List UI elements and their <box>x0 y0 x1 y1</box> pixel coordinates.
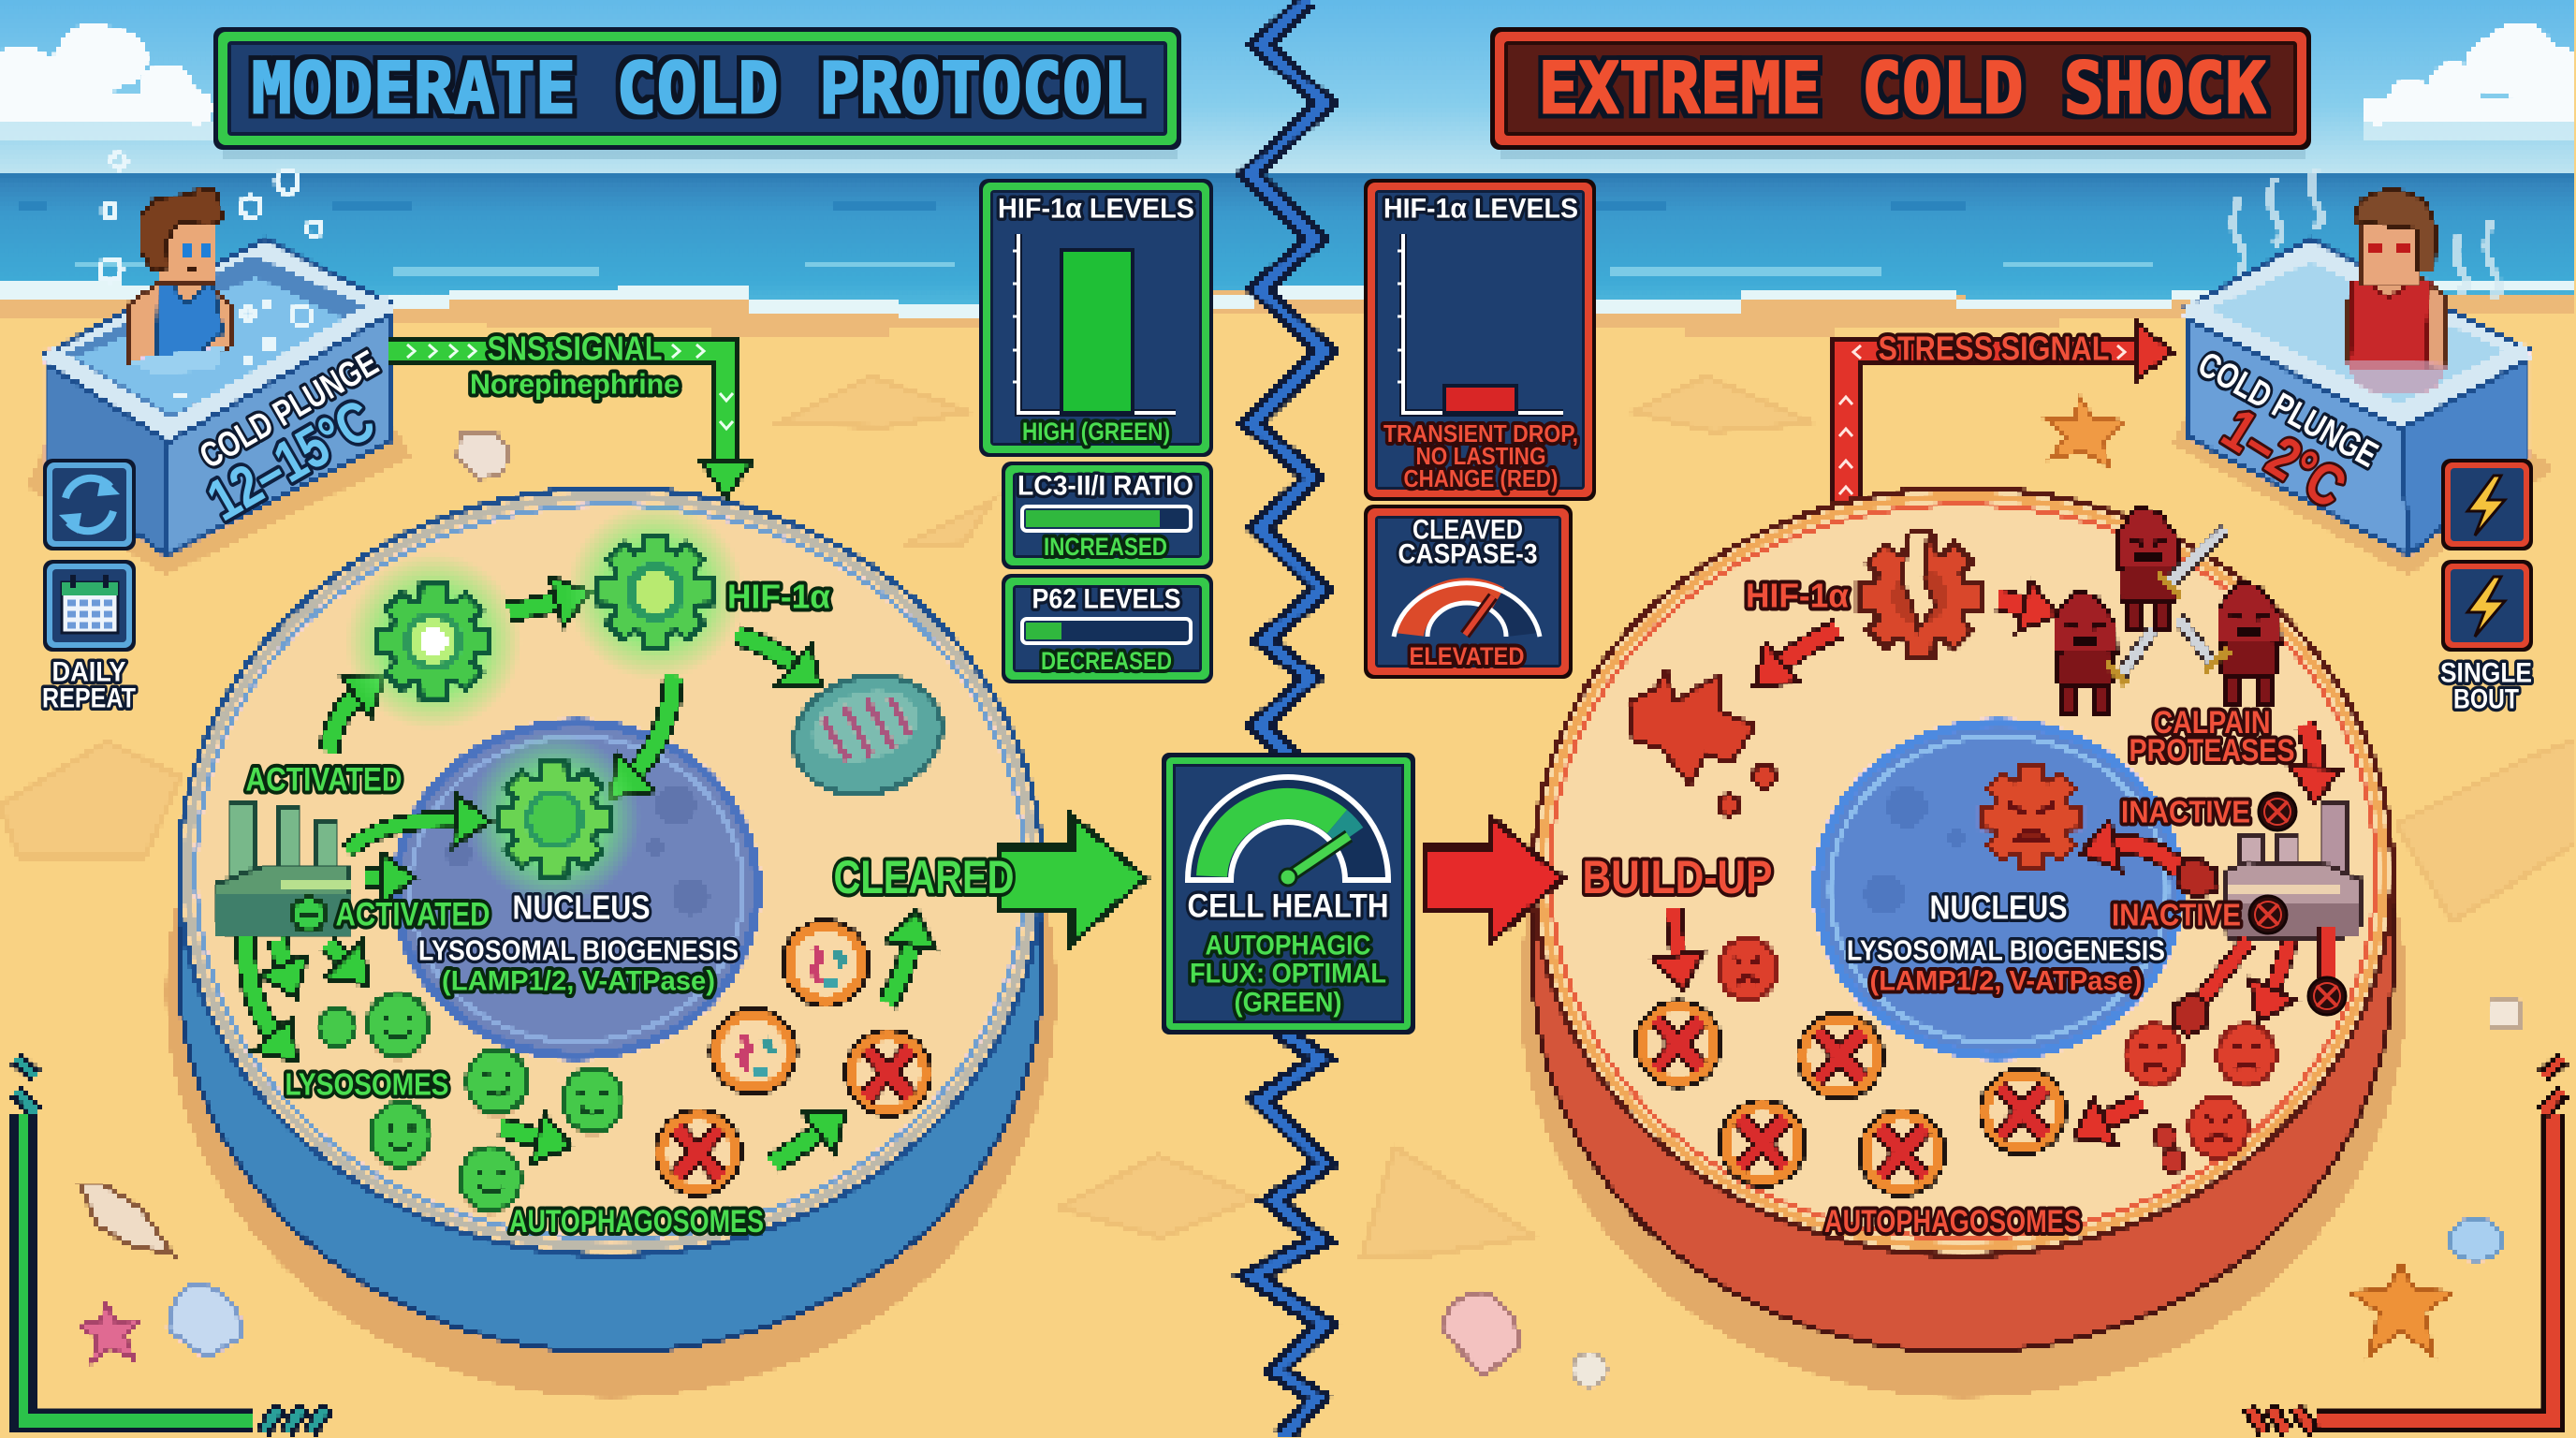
cell top surface <box>179 488 1042 1255</box>
label: lysosomal biogenesis right: LYSOSOMAL BIOGENESIS <box>1847 934 2165 966</box>
label: nucleus right: NUCLEUS <box>1930 888 2067 927</box>
label: lamp right: (LAMP1/2, V-ATPase) <box>1870 966 2142 996</box>
panel: right cell <box>1519 488 2407 1398</box>
nucleus: right <box>1817 723 2180 1056</box>
label: lysosomes: LYSOSOMES <box>285 1067 449 1101</box>
arrow: autophagosome to next <box>772 1127 826 1164</box>
sea ripples <box>19 206 2153 271</box>
autophagosomes: right <box>1633 999 2068 1197</box>
arrow: factory to gear 1 <box>329 691 363 752</box>
decorative beach items <box>79 398 2522 1387</box>
label: activated lower: ACTIVATED <box>335 897 490 932</box>
background: sand <box>0 290 2576 1438</box>
panel: hif-1a levels right: TRANSIENT DROP, <box>1383 419 1578 448</box>
icon: lightning top <box>2441 459 2533 550</box>
background: sea <box>0 172 2576 309</box>
arrow: gear 1 to gear 2 <box>508 599 565 612</box>
icon: inactive upper <box>2259 793 2296 830</box>
arrow: build-up big red <box>1424 815 1563 944</box>
gear: angry nuclear <box>1980 766 2083 869</box>
label: lamp left: (LAMP1/2, V-ATPase) <box>442 966 715 996</box>
cloud: left <box>0 22 213 139</box>
arrow: cleared big green <box>998 815 1146 944</box>
icon: lightning bottom <box>2441 560 2533 652</box>
panel: lc3 ratio: LC3-II/I RATIO <box>1017 470 1193 502</box>
nucleus: left <box>396 723 757 1056</box>
corner frame: bottom left <box>16 1058 328 1432</box>
person: calm swimmer <box>128 187 231 362</box>
lysosomes: sad <box>1719 938 2276 1172</box>
debris: near factory <box>2176 857 2218 899</box>
arrow: gear 2 to mitochondrion <box>736 635 801 670</box>
cell base <box>1533 872 2393 1352</box>
label: single bout <box>2440 657 2532 715</box>
label: autophagosomes left: AUTOPHAGOSOMES <box>509 1204 764 1240</box>
label: norepinephrine: Norepinephrine <box>470 367 680 401</box>
tub label: left: COLD PLUNGE <box>194 344 385 477</box>
arrow chevrons: sns <box>407 345 733 429</box>
arrow: calpain to factory <box>2305 724 2316 777</box>
arrow: broken gear to calpain <box>1998 599 2033 609</box>
SNS signal arrow <box>390 351 753 498</box>
sand dunes <box>0 376 2576 1255</box>
tub label: left: 12–15°C <box>198 388 385 534</box>
label: hif-1a right: HIF-1α <box>1746 577 1849 614</box>
label: lysosomal biogenesis left: LYSOSOMAL BIOGENESIS <box>418 934 739 966</box>
arrows: factory down <box>2200 927 2328 1002</box>
arrows: factory to lysosomes <box>246 936 350 1041</box>
arrow: autophagosome to cleared <box>886 936 913 1004</box>
label: activated upper: ACTIVATED <box>245 762 402 798</box>
panel: cleaved caspase-3: CASPASE-3 <box>1398 539 1537 569</box>
panel: hif-1a levels right: HIF-1α LEVELS <box>1383 193 1578 225</box>
calpain: goblin 3 <box>2178 581 2280 703</box>
label: build-up: BUILD-UP <box>1582 851 1773 903</box>
calpain: goblin 2 <box>2055 591 2153 712</box>
panel: hif-1a levels right: CHANGE (RED) <box>1404 464 1558 492</box>
debris: end of arrow <box>2174 992 2209 1035</box>
background: sky <box>0 0 2576 174</box>
tub label: right: 1–2°C <box>2211 397 2357 521</box>
gauge: cell health <box>1188 777 1388 886</box>
panel: cleaved caspase-3: CLEAVED <box>1412 515 1523 545</box>
arrow: build-up down <box>1674 907 1680 964</box>
label: sns signal: SNS SIGNAL <box>487 330 663 367</box>
mitochondrion <box>781 659 955 811</box>
icon: refresh <box>43 459 136 550</box>
bar: low <box>1444 386 1516 413</box>
label: cleared: CLEARED <box>833 851 1015 903</box>
panel: hif-1a levels left: HIF-1α LEVELS <box>998 193 1194 225</box>
cell base <box>179 872 1043 1352</box>
panel: p62 levels: P62 LEVELS <box>1032 584 1181 614</box>
label: daily repeat <box>42 657 136 713</box>
panel: cell health: AUTOPHAGIC <box>1206 931 1370 961</box>
label: single bout: BOUT <box>2453 683 2519 715</box>
panel: lc3 ratio <box>1002 462 1213 569</box>
autophagosomes: left <box>653 918 933 1197</box>
tub label: right: COLD PLUNGE <box>2191 345 2384 476</box>
panel: hif-1a levels left <box>979 179 1213 457</box>
lysosomes: happy <box>318 992 623 1215</box>
arrow: lysosomes to autophagosome <box>501 1127 547 1140</box>
panel: lc3 ratio: INCREASED <box>1044 533 1167 561</box>
corner frame: bottom right <box>2248 1058 2563 1432</box>
title: moderate cold protocol <box>213 27 1181 159</box>
panel: left cell <box>166 488 1057 1398</box>
label: daily repeat: REPEAT <box>42 683 136 713</box>
gear: nuclear hif-1a <box>468 733 640 905</box>
tub: left cold plunge body <box>26 187 412 576</box>
title: extreme cold shock <box>1490 27 2311 159</box>
title: extreme cold shock: EXTREME COLD SHOCK <box>1539 47 2266 129</box>
panel: cell health: CELL HEALTH <box>1187 888 1389 925</box>
gear: activated glowing <box>344 552 522 730</box>
label: calpain proteases: PROTEASES <box>2129 733 2295 769</box>
label: daily repeat: DAILY <box>52 657 125 687</box>
panel: cell health <box>1162 753 1415 1034</box>
panel: cell health: (GREEN) <box>1234 987 1342 1019</box>
panel: hif-1a levels right <box>1364 179 1596 501</box>
label: nucleus left: NUCLEUS <box>513 888 650 927</box>
stress signal arrow <box>1846 324 2174 506</box>
arrow: factory to nucleus gear <box>346 820 464 852</box>
cloud: right <box>2363 22 2576 139</box>
arrow: sad to autophagosome <box>2097 1102 2142 1125</box>
label: inactive upper: INACTIVE <box>2121 794 2250 829</box>
arrow: gear 2 to nucleus gear <box>629 676 674 779</box>
label: calpain proteases <box>2129 705 2295 769</box>
panel: cleaved caspase-3 <box>1364 505 1573 679</box>
icon: inactive lower <box>2249 896 2287 933</box>
label: single bout: SINGLE <box>2440 657 2532 689</box>
icon: inactive arrow end <box>2308 977 2346 1015</box>
sea foam <box>0 283 2576 316</box>
gauge: caspase <box>1394 583 1540 637</box>
wet sand band <box>0 290 2576 337</box>
label: autophagosomes right: AUTOPHAGOSOMES <box>1824 1204 2081 1240</box>
bubbles <box>99 154 322 281</box>
gear: hif-1a <box>566 503 744 681</box>
panel: p62 levels: DECREASED <box>1041 647 1172 675</box>
title: moderate cold protocol: MODERATE COLD PROTOCOL <box>251 47 1144 129</box>
divider: zigzag <box>1250 0 1325 1438</box>
fragments: degraded hif-1a <box>1629 670 1776 815</box>
arrow: broken gear to fragments <box>1775 629 1838 668</box>
factory: activated <box>215 803 349 936</box>
factory: inactive <box>2226 803 2362 938</box>
cell top surface <box>1533 488 2393 1255</box>
arrow: factory to angry gear <box>2106 845 2181 871</box>
arrow: factory short <box>365 867 389 889</box>
label: stress signal: STRESS SIGNAL <box>1878 330 2110 367</box>
person: stressed swimmer <box>2348 190 2447 370</box>
panel: cell health: FLUX: OPTIMAL <box>1190 959 1386 989</box>
progress: lc3 <box>1022 506 1191 531</box>
gear: broken hif-1a <box>1859 531 1981 657</box>
label: inactive lower: INACTIVE <box>2112 897 2241 932</box>
progress: p62 <box>1022 619 1191 643</box>
steam <box>2233 169 2499 296</box>
arrow chevrons: stress <box>1839 345 2125 494</box>
icon: calendar <box>43 560 136 652</box>
icon: activated dot <box>292 898 326 932</box>
label: hif-1a left: HIF-1α <box>727 577 830 616</box>
panel: hif-1a levels left: HIGH (GREEN) <box>1022 418 1170 446</box>
calpain: goblin 1 <box>2117 506 2225 628</box>
panel: cleaved caspase-3: ELEVATED <box>1410 642 1524 670</box>
tub: right cold plunge body <box>2172 190 2555 576</box>
panel: p62 levels <box>1002 574 1213 683</box>
bar: high <box>1061 250 1133 413</box>
label: calpain proteases: CALPAIN <box>2153 705 2271 741</box>
panel: hif-1a levels right: NO LASTING <box>1415 442 1546 470</box>
